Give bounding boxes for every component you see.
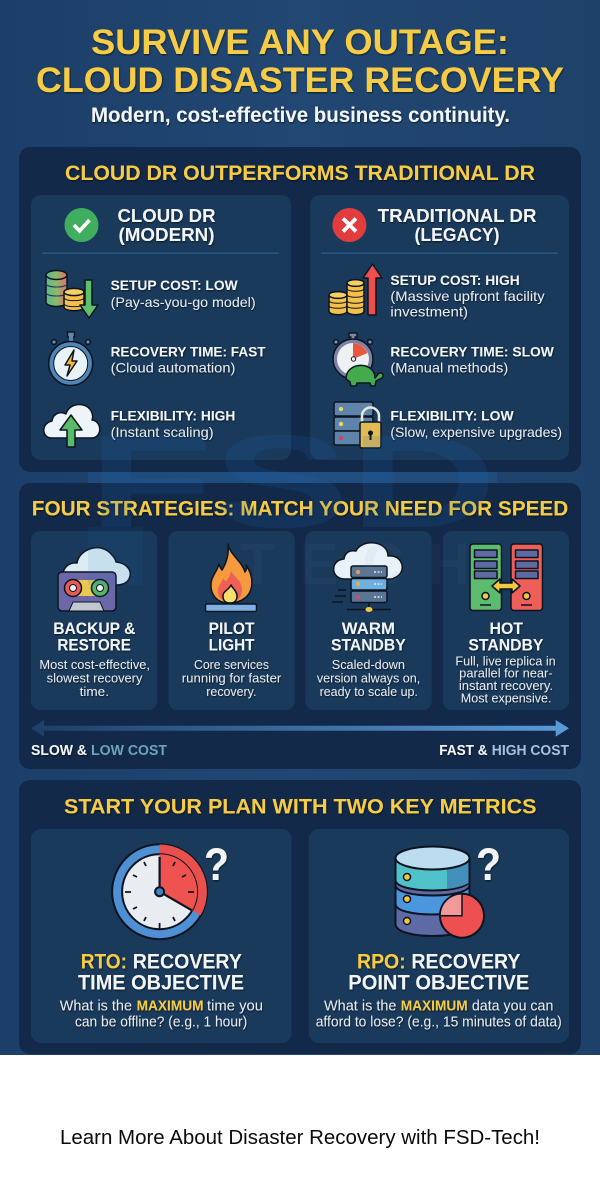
footer text: Learn More About Disaster Recovery with FSD-Tech! <box>60 1127 540 1149</box>
heading: comparison: CLOUD DR OUTPERFORMS TRADITIONAL DR <box>65 162 535 185</box>
recovery time fast: (Cloud automation) <box>111 360 235 376</box>
panel: cloud DR <box>31 195 291 460</box>
setup cost high: SETUP COST: HIGH <box>390 272 520 288</box>
backup title: RESTORE <box>57 637 131 655</box>
RPO description: MAXIMUM <box>401 999 468 1015</box>
scale label: fast and high cost <box>439 743 569 759</box>
pilot description: recovery. <box>206 685 256 699</box>
watermark: FSD Tech: FSD <box>88 408 497 555</box>
hot description: instant recovery. <box>459 679 553 693</box>
recovery time slow: (Manual methods) <box>390 360 508 376</box>
icon: cloud with up arrow <box>44 404 100 447</box>
watermark: FSD Tech: TECH <box>240 532 470 597</box>
icon: stopwatch with turtle <box>333 333 383 386</box>
panel: cloud vs traditional <box>19 147 581 472</box>
icon: question mark: ? <box>204 839 229 890</box>
RTO title <box>78 950 244 994</box>
setup cost high: (Massive upfront facility <box>390 288 545 304</box>
panel: key metrics <box>19 780 581 1054</box>
RPO description: What is the <box>324 999 396 1015</box>
card: hot standby <box>443 531 569 710</box>
RTO description: time you <box>207 999 263 1015</box>
icon: green check <box>64 208 98 242</box>
icon: coins and down arrow <box>46 270 98 318</box>
RPO description: data you can <box>472 999 553 1015</box>
scale label: slow and low cost <box>31 743 167 759</box>
warm title: STANDBY <box>331 637 406 655</box>
hot title: STANDBY <box>468 637 543 655</box>
title <box>36 23 564 100</box>
pilot title: LIGHT <box>209 637 254 655</box>
pilot description: Core services <box>194 658 269 672</box>
flexibility low <box>390 408 562 440</box>
backup description: Most cost-effective, <box>39 658 150 672</box>
pilot title: PILOT <box>209 620 254 638</box>
cloud DR heading: (MODERN) <box>118 225 214 245</box>
panel: traditional DR <box>310 195 569 460</box>
flexibility low: FLEXIBILITY: LOW <box>390 408 514 424</box>
hot title <box>468 620 543 655</box>
backup title: BACKUP & <box>53 620 136 638</box>
hot description: Most expensive. <box>461 691 552 705</box>
RTO description: can be offline? (e.g., 1 hour) <box>75 1015 247 1031</box>
cloud DR heading: CLOUD DR <box>118 206 216 226</box>
title: SURVIVE ANY OUTAGE: <box>91 23 509 62</box>
card: backup and restore <box>31 531 157 710</box>
RTO title: RECOVERY <box>133 950 242 973</box>
pilot description <box>182 658 281 699</box>
traditional DR heading: (LEGACY) <box>414 225 500 245</box>
traditional DR heading: TRADITIONAL DR <box>378 206 536 226</box>
icon: red cross <box>332 208 366 242</box>
heading: strategies: FOUR STRATEGIES: MATCH YOUR NEED FOR SPEED <box>32 497 568 520</box>
card: pilot light <box>168 531 295 710</box>
heading: metrics: START YOUR PLAN WITH TWO KEY METRICS <box>64 795 536 818</box>
RPO title: RECOVERY <box>411 950 520 973</box>
recovery time slow: RECOVERY TIME: SLOW <box>390 344 555 360</box>
RTO description: What is the <box>60 999 132 1015</box>
card: RPO <box>309 829 569 1043</box>
arrow: speed and cost scale <box>31 720 569 737</box>
setup cost high: investment) <box>390 304 468 320</box>
scale label: fast and high cost: HIGH COST <box>492 743 569 759</box>
recovery time fast: RECOVERY TIME: FAST <box>111 344 266 360</box>
setup cost low: (Pay-as-you-go model) <box>111 294 256 310</box>
warm description: Scaled-down <box>332 658 405 672</box>
icon: question mark: ? <box>476 839 501 890</box>
recovery time slow <box>390 344 555 376</box>
warm description: ready to scale up. <box>320 685 418 699</box>
hot title: HOT <box>490 620 523 638</box>
RPO title: POINT OBJECTIVE <box>348 971 529 994</box>
footer banner <box>0 1055 600 1200</box>
warm title <box>331 620 406 655</box>
RPO description: afford to lose? (e.g., 15 minutes of data) <box>316 1015 562 1031</box>
icon: cloud server <box>332 543 402 612</box>
icon: flame <box>206 544 256 612</box>
RTO description <box>60 999 263 1031</box>
flexibility low: (Slow, expensive upgrades) <box>390 424 562 440</box>
icon: locked server <box>334 402 381 448</box>
warm description <box>317 658 420 699</box>
icon: coins and up arrow <box>329 264 382 315</box>
icon: clock <box>112 844 207 939</box>
flexibility high: FLEXIBILITY: HIGH <box>111 408 235 424</box>
hot description: Full, live replica in <box>455 654 556 668</box>
warm title: WARM <box>342 620 395 638</box>
subtitle: Modern, cost-effective business continuity. <box>91 104 510 127</box>
setup cost low: SETUP COST: LOW <box>111 277 238 293</box>
RTO description: MAXIMUM <box>137 999 204 1015</box>
icon: twin servers <box>470 544 542 610</box>
scale label: fast and high cost: FAST & <box>439 743 488 759</box>
warm description: version always on, <box>317 672 420 686</box>
backup description: slowest recovery <box>47 672 143 686</box>
flexibility high <box>111 408 235 440</box>
setup cost high <box>390 272 545 320</box>
RPO title: RPO: <box>357 950 406 973</box>
title: CLOUD DISASTER RECOVERY <box>36 61 564 100</box>
panel: four strategies <box>19 483 581 769</box>
RPO description <box>316 999 562 1031</box>
flexibility high: (Instant scaling) <box>111 424 214 440</box>
RPO title <box>348 950 529 994</box>
hot description <box>455 654 556 705</box>
pilot description: running for faster <box>182 672 281 686</box>
recovery time fast <box>111 344 266 376</box>
pilot title <box>209 620 254 655</box>
scale label: slow and low cost: SLOW & <box>31 743 88 759</box>
icon: database with pie <box>396 846 484 938</box>
RTO title: TIME OBJECTIVE <box>78 971 244 994</box>
icon: cassette and cloud <box>58 548 130 611</box>
backup title <box>53 620 136 655</box>
traditional DR heading <box>378 206 536 245</box>
card: warm standby <box>305 531 432 710</box>
watermark: FSD Tech <box>88 408 497 597</box>
icon: stopwatch with bolt <box>49 332 93 386</box>
hot description: parallel for near- <box>459 667 553 681</box>
cloud DR heading <box>118 206 216 245</box>
setup cost low <box>111 277 256 310</box>
card: RTO <box>31 829 292 1043</box>
RTO title: RTO: <box>81 950 127 973</box>
scale label: slow and low cost: LOW COST <box>91 743 167 759</box>
backup description <box>39 658 150 699</box>
backup description: time. <box>80 685 109 699</box>
